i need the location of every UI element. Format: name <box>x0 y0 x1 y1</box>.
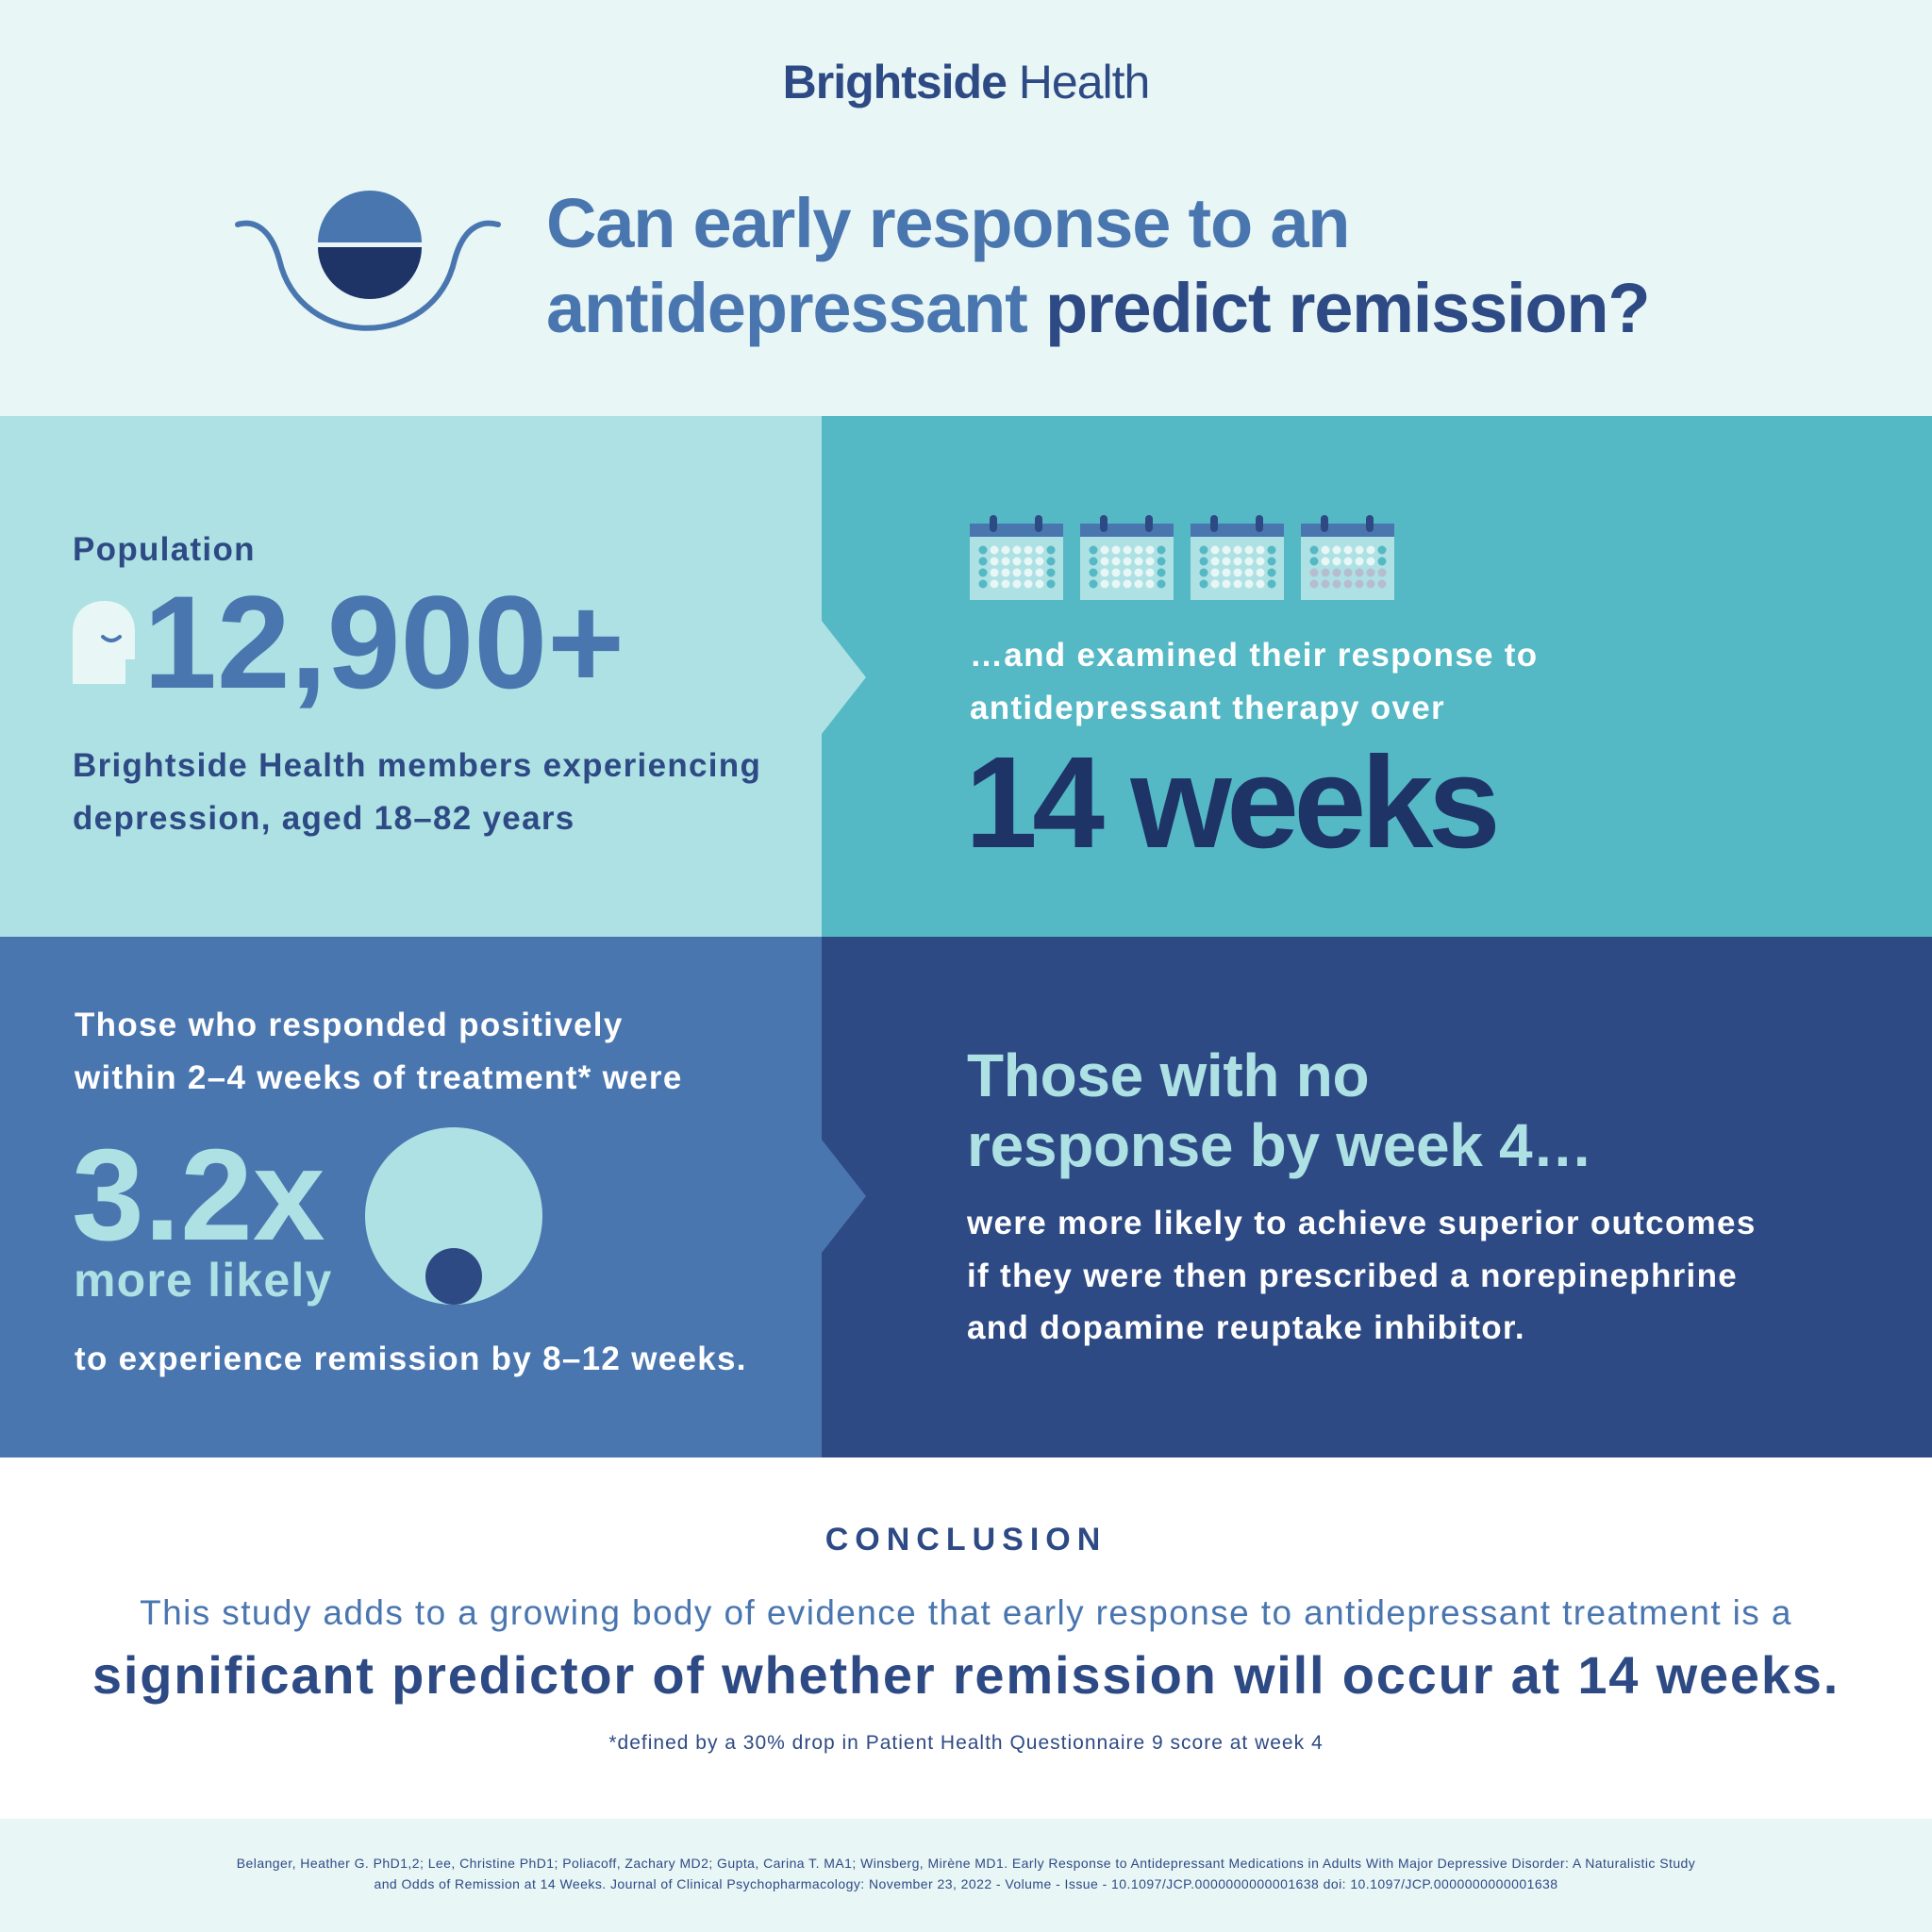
heading: response by week 4… <box>967 1111 1592 1179</box>
conclusion emphasis: significant predictor of whether remission will occur at 14 weeks. <box>92 1645 1840 1705</box>
title <box>546 184 1649 347</box>
icon: head <box>73 601 135 684</box>
footer citation <box>0 1819 1932 1932</box>
body: if they were then prescribed a norepinephrine <box>967 1257 1738 1294</box>
body: and dopamine reuptake inhibitor. <box>967 1309 1525 1346</box>
body <box>966 1205 1757 1346</box>
description <box>73 747 761 837</box>
panel: non-responders <box>822 937 1932 1457</box>
description: depression, aged 18–82 years <box>73 800 575 837</box>
panel: early responders <box>0 937 822 1457</box>
text intro <box>74 1007 683 1096</box>
text: examined response: …and examined their response to <box>970 637 1538 674</box>
icon: bowl with circle <box>235 191 501 331</box>
title: Can early response to an <box>546 184 1349 262</box>
panel: 14 weeks <box>822 416 1932 937</box>
text remission: to experience remission by 8–12 weeks. <box>75 1341 747 1377</box>
arrow row 2 <box>822 1140 866 1253</box>
icon: circles <box>365 1127 542 1305</box>
title: antidepressant predict remission? <box>546 269 1649 347</box>
calendars <box>970 515 1394 600</box>
stat 14 weeks: 14 weeks <box>965 730 1495 875</box>
stat 3.2x: 3.2x <box>72 1123 325 1268</box>
arrow row 1 <box>822 621 866 734</box>
panel: population <box>0 416 822 937</box>
text intro: Those who responded positively <box>75 1007 624 1043</box>
more likely: more likely <box>74 1254 332 1307</box>
conclusion heading: CONCLUSION <box>825 1522 1107 1557</box>
text: examined response <box>970 637 1538 726</box>
footer citation: Belanger, Heather G. PhD1,2; Lee, Christine PhD1; Poliacoff, Zachary MD2; Gupta, Carina T. MA1; Winsberg, Mirène MD1. Early Response to Antidepressant Medications in Adults With Major Depressive Disorder: A Naturalistic Study <box>237 1856 1695 1871</box>
footnote: *defined by a 30% drop in Patient Health Questionnaire 9 score at week 4 <box>608 1732 1324 1754</box>
heading <box>967 1041 1592 1179</box>
text: examined response: antidepressant therapy over <box>970 690 1445 726</box>
logo: Brightside Health <box>783 56 1149 108</box>
description: Brightside Health members experiencing <box>73 747 761 784</box>
heading: Those with no <box>967 1041 1369 1109</box>
body: were more likely to achieve superior outcomes <box>967 1205 1757 1241</box>
label population: Population <box>73 531 256 568</box>
conclusion text: This study adds to a growing body of evidence that early response to antidepressant treatment is a <box>140 1593 1792 1632</box>
header background <box>0 0 1932 416</box>
stat 12,900+: 12,900+ <box>143 568 625 716</box>
footer citation: and Odds of Remission at 14 Weeks. Journal of Clinical Psychopharmacology: November 23, 2022 - Volume - Issue - 10.1097/JCP.0000000000001638 doi: 10.1097/JCP.0000000000001638 <box>374 1876 1558 1891</box>
conclusion <box>0 1457 1932 1819</box>
text intro: within 2–4 weeks of treatment* were <box>75 1059 683 1096</box>
